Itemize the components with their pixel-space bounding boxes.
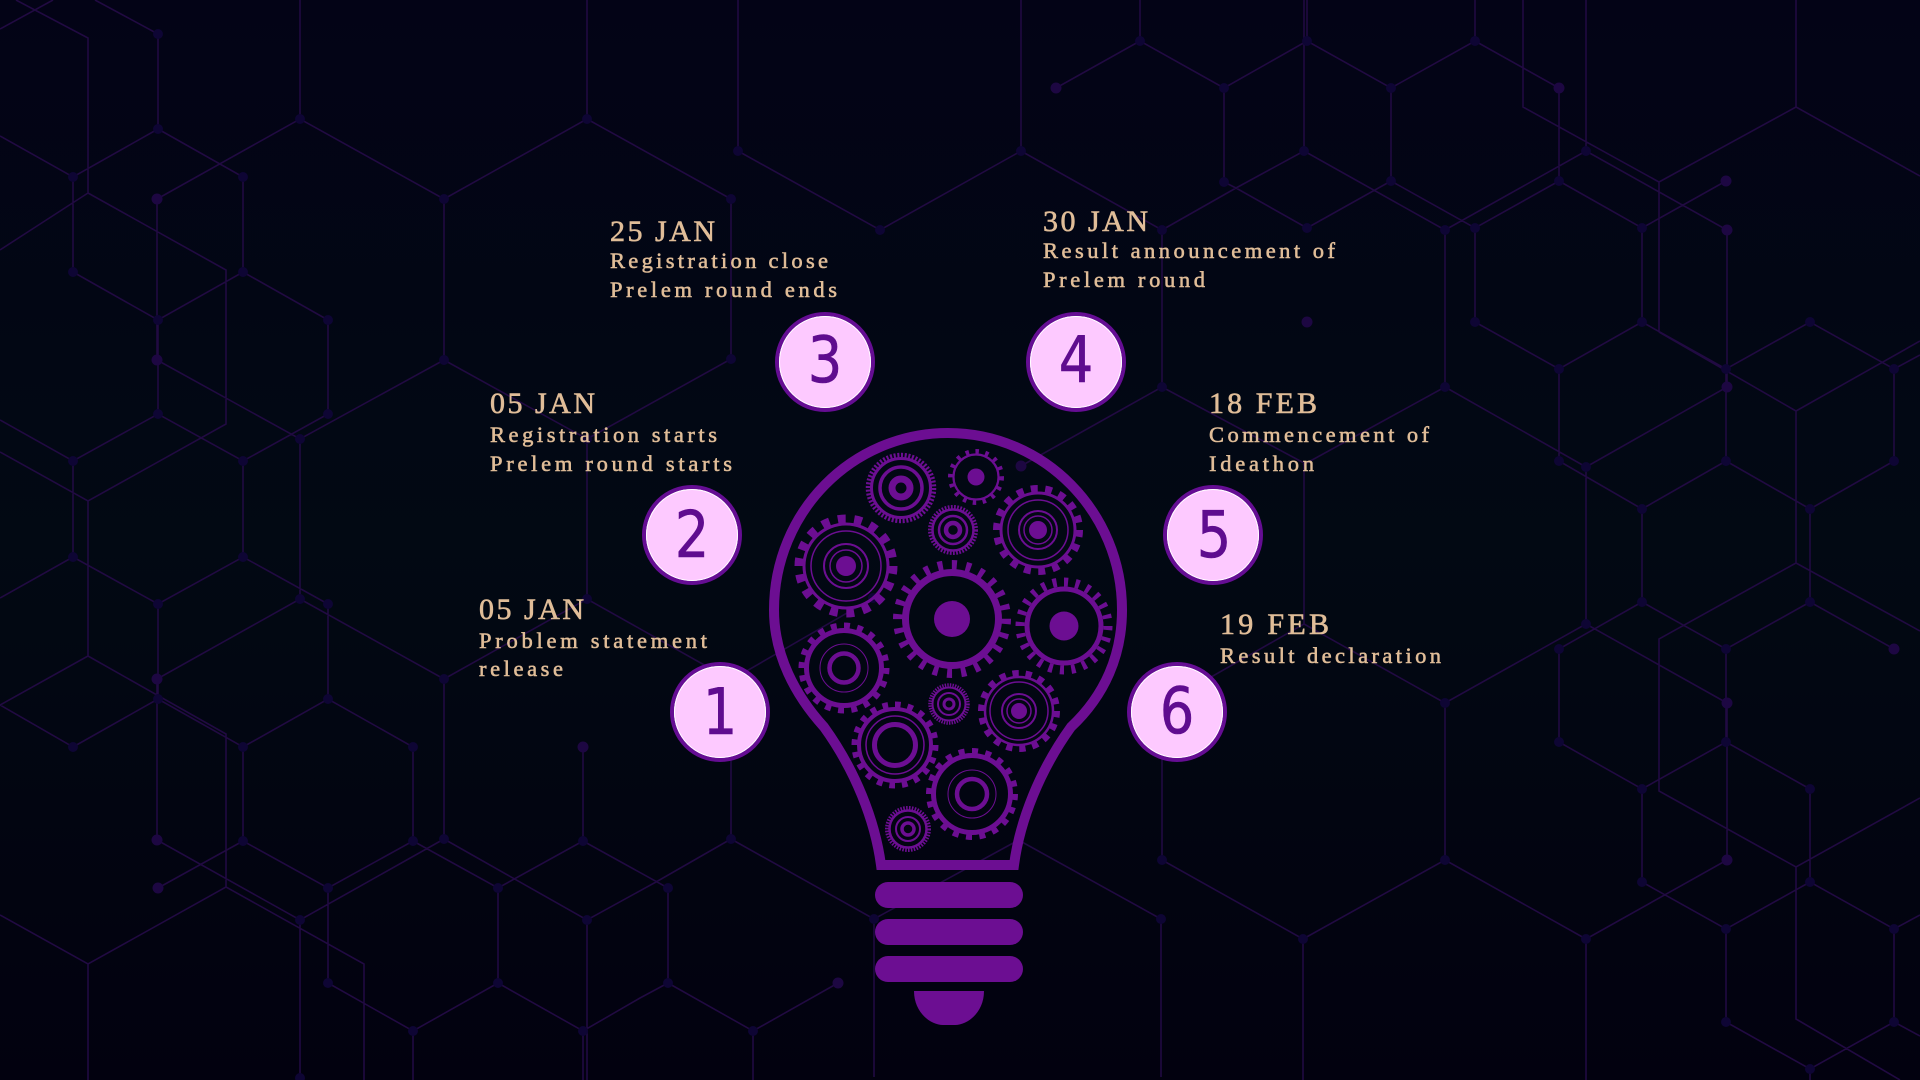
step 6 badge: 6: [1160, 675, 1194, 749]
step 2 badge: [644, 487, 740, 583]
gear 9: [930, 685, 968, 723]
step 1 text: [479, 593, 708, 681]
gear 1: [868, 455, 934, 521]
step 6 text: Result declaration: [1220, 643, 1441, 668]
step 1 text: release: [479, 656, 563, 681]
gear 11: [855, 705, 935, 785]
step 1 text: Problem statement: [479, 628, 708, 653]
light bulb with gears: [774, 433, 1122, 1025]
step 5 badge: [1165, 487, 1261, 583]
gear 13: [887, 808, 929, 850]
step 2 text: 05 JAN: [490, 387, 595, 420]
step 5 text: Ideathon: [1209, 451, 1314, 476]
gear 4: [997, 489, 1079, 571]
step 3 badge: 3: [808, 324, 842, 398]
step 2 text: [490, 387, 732, 476]
gear 10: [982, 674, 1056, 748]
step 5 badge: 5: [1197, 499, 1231, 573]
gear 6: [899, 566, 1005, 672]
step 4 text: Result announcement of: [1043, 238, 1336, 263]
step 3 text: Prelem round ends: [610, 277, 837, 302]
step 1 text: 05 JAN: [479, 593, 584, 626]
step 5 text: 18 FEB: [1209, 387, 1317, 420]
gear 7: [1020, 582, 1108, 670]
step 4 badge: 4: [1059, 324, 1093, 398]
gear 12: [929, 751, 1015, 837]
bulb screw base: [875, 882, 1023, 1025]
gear 3: [930, 507, 976, 553]
step 2 text: Registration starts: [490, 422, 717, 447]
step 3 text: [610, 215, 837, 302]
step 1 badge: [672, 664, 768, 760]
step 4 text: [1043, 205, 1336, 292]
step 3 badge: [777, 314, 873, 410]
step 4 text: 30 JAN: [1043, 205, 1148, 238]
step 5 text: Commencement of: [1209, 422, 1430, 447]
step 2 text: Prelem round starts: [490, 451, 732, 476]
step 2 badge: 2: [675, 499, 709, 573]
step 1 badge: 1: [703, 676, 737, 750]
step 6 text: 19 FEB: [1220, 608, 1329, 641]
bulb outline: [774, 433, 1122, 865]
gear 8: [802, 626, 886, 710]
step 4 text: Prelem round: [1043, 267, 1205, 292]
step 5 text: [1209, 387, 1430, 476]
gear 2: [950, 452, 1002, 502]
step 6 text: [1220, 608, 1441, 668]
gear 5: [799, 519, 893, 613]
step 6 badge: [1129, 664, 1225, 760]
step 3 text: 25 JAN: [610, 215, 715, 248]
step 4 badge: [1028, 314, 1124, 410]
step 3 text: Registration close: [610, 248, 828, 273]
